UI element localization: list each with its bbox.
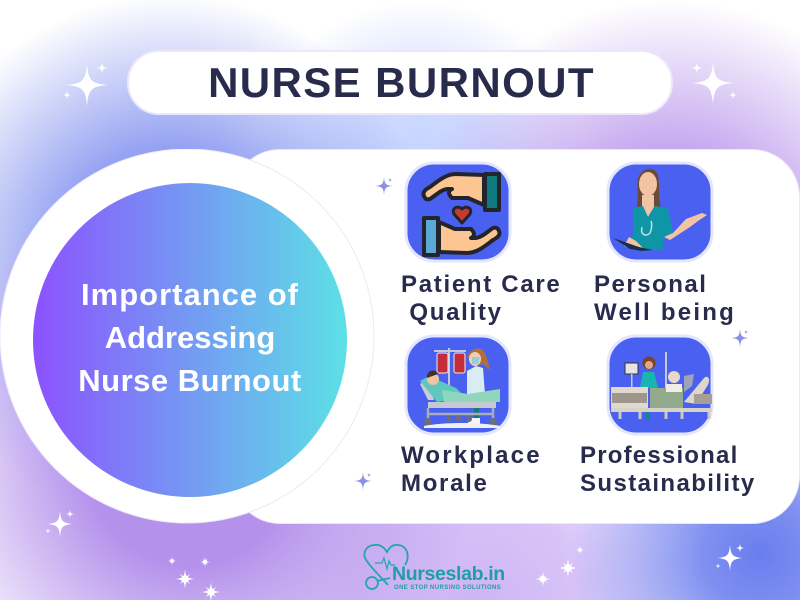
label: personal well being: Personal Well being [594,271,736,326]
circle: importance of addressing nurse burnout: Nurse Burnout [78,363,302,398]
title banner [127,50,673,115]
logo: nurseslab.in: Nurseslab.in [392,563,505,585]
label: workplace morale: Workplace Morale [401,442,542,496]
icon: nurse with clipboard [606,162,714,262]
logo: nurseslab.in: ONE STOP NURSING SOLUTIONS [394,585,501,591]
icon: caring hands with heart [404,162,512,262]
circle: importance of addressing nurse burnout: Importance of [81,277,299,312]
panel: white rounded content panel [232,149,800,524]
icon: nurse beside hospital bed [606,334,714,436]
label: patient care quality: Patient Care Quality [401,271,561,326]
circle: importance of addressing nurse burnout: Addressing [105,320,275,355]
label: professional sustainability: Professional Sustainability [580,442,756,496]
logo: nurseslab.in [364,544,505,591]
icon: nurse with patient on IV [404,334,512,436]
title banner: NURSE BURNOUT [208,59,595,106]
circle: importance of addressing nurse burnout [0,149,374,524]
